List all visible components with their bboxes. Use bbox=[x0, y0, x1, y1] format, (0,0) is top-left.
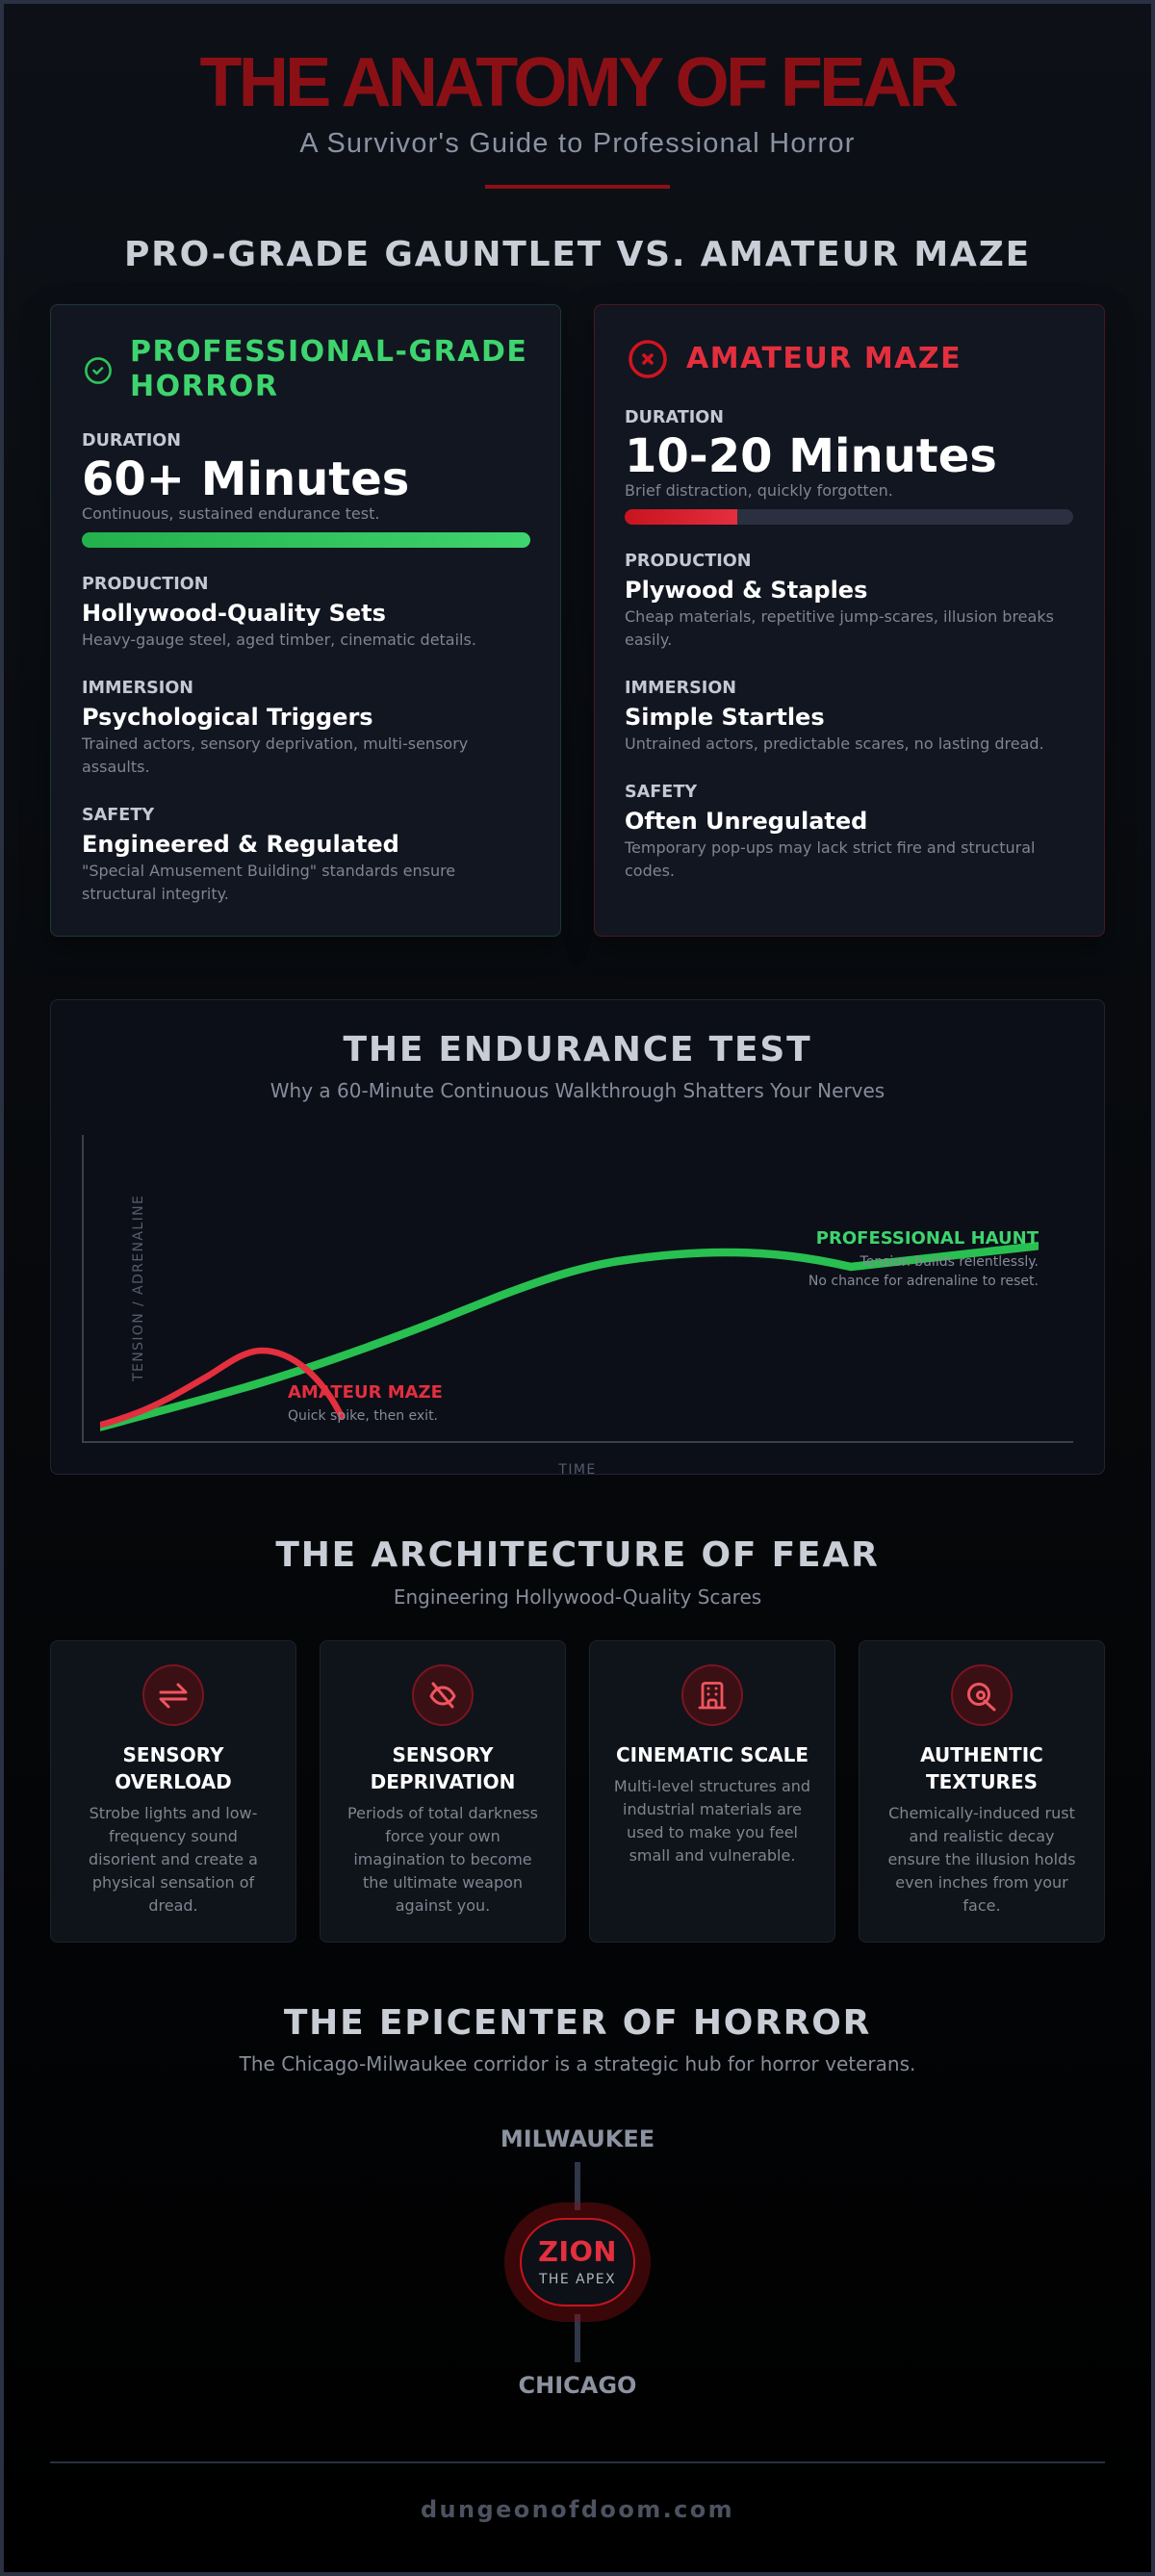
card text: physical sensation of bbox=[92, 1873, 254, 1892]
metric: immersion: Untrained actors, predictable scares, no lasting dread. bbox=[625, 734, 1044, 753]
icon: swap arrows bbox=[142, 1664, 204, 1726]
card text bbox=[347, 1804, 538, 1915]
metric: production bbox=[82, 575, 476, 649]
card text bbox=[614, 1777, 810, 1865]
metric: safety: Temporary pop-ups may lack strict fire and structural bbox=[625, 838, 1035, 857]
curve: professional haunt bbox=[92, 1245, 1049, 1429]
card text: Multi-level structures and bbox=[614, 1777, 810, 1795]
metric: duration: DURATION bbox=[82, 431, 181, 451]
card title: AUTHENTIC bbox=[920, 1743, 1043, 1766]
card text bbox=[89, 1804, 258, 1915]
chart axes bbox=[83, 1135, 1073, 1442]
card title: SENSORY bbox=[393, 1743, 493, 1766]
heading: comparison: PRO-GRADE GAUNTLET VS. AMATEUR MAZE bbox=[124, 235, 1031, 274]
panel heading: PROFESSIONAL-GRADE bbox=[130, 335, 527, 369]
card title bbox=[920, 1743, 1043, 1793]
panel: professional-grade horror bbox=[50, 304, 561, 937]
card text bbox=[887, 1804, 1076, 1915]
card text: against you. bbox=[396, 1896, 490, 1915]
line chart: tension over time bbox=[82, 1135, 1073, 1478]
metric: immersion bbox=[81, 679, 468, 776]
card title: OVERLOAD bbox=[115, 1770, 232, 1793]
card text: industrial materials are bbox=[623, 1800, 802, 1818]
panel heading bbox=[130, 335, 527, 403]
metric: immersion: assaults. bbox=[82, 758, 150, 776]
metric: duration: 60+ Minutes bbox=[82, 452, 409, 506]
metric: immersion: IMMERSION bbox=[625, 679, 736, 698]
label: professional haunt: PROFESSIONAL HAUNT bbox=[816, 1228, 1040, 1249]
metric: immersion: Simple Startles bbox=[625, 704, 825, 731]
metric: immersion: Psychological Triggers bbox=[82, 704, 373, 731]
metric: immersion: Trained actors, sensory deprivation, multi-sensory bbox=[82, 734, 468, 753]
metric: production: Heavy-gauge steel, aged timber, cinematic details. bbox=[82, 631, 476, 649]
metric: production bbox=[625, 552, 1054, 649]
card title bbox=[115, 1743, 232, 1793]
metric: production: PRODUCTION bbox=[82, 575, 208, 594]
hub: zion bbox=[520, 2218, 635, 2306]
card text: force your own bbox=[385, 1827, 500, 1845]
card title bbox=[371, 1743, 515, 1793]
label: professional haunt: No chance for adrenaline to reset. bbox=[808, 1274, 1039, 1289]
heading: epicenter: THE EPICENTER OF HORROR bbox=[284, 2003, 871, 2043]
hub name: ZION bbox=[538, 2235, 617, 2268]
label: amateur maze: Quick spike, then exit. bbox=[288, 1408, 438, 1424]
card title: SENSORY bbox=[123, 1743, 223, 1766]
icon: magnifier bbox=[951, 1664, 1013, 1726]
footer divider bbox=[50, 2461, 1105, 2463]
city label: chicago: CHICAGO bbox=[519, 2372, 636, 2399]
card text: used to make you feel bbox=[627, 1823, 798, 1842]
label: professional haunt: Tension builds relentlessly. bbox=[859, 1254, 1039, 1270]
card text: the ultimate weapon bbox=[363, 1873, 523, 1892]
metric: safety: Often Unregulated bbox=[625, 808, 867, 835]
metric: safety: Engineered & Regulated bbox=[82, 831, 399, 858]
metric: immersion: IMMERSION bbox=[82, 679, 193, 698]
metric: duration: Brief distraction, quickly forgotten. bbox=[625, 481, 893, 500]
metric: duration bbox=[82, 431, 409, 523]
heading: architecture: THE ARCHITECTURE OF FEAR bbox=[275, 1535, 880, 1575]
subheading: Why a 60-Minute Continuous Walkthrough Shatters Your Nerves bbox=[270, 1079, 885, 1102]
card text: Strobe lights and low- bbox=[90, 1804, 257, 1822]
label: amateur maze bbox=[288, 1382, 443, 1424]
card text: frequency sound bbox=[109, 1827, 238, 1845]
progress bar: full bbox=[82, 532, 530, 548]
metric: production: Plywood & Staples bbox=[625, 577, 867, 604]
metric: safety: codes. bbox=[625, 862, 675, 880]
metric: safety: SAFETY bbox=[625, 783, 697, 802]
metric: immersion bbox=[625, 679, 1044, 753]
card text: even inches from your bbox=[895, 1873, 1068, 1892]
metric: duration: 10-20 Minutes bbox=[625, 429, 997, 483]
icon: x circle bbox=[629, 340, 667, 378]
subtitle: A Survivor's Guide to Professional Horror bbox=[299, 128, 856, 159]
metric: production: PRODUCTION bbox=[625, 552, 751, 571]
card title: DEPRIVATION bbox=[371, 1770, 515, 1793]
metric: safety bbox=[624, 783, 1035, 880]
metric: production: Hollywood-Quality Sets bbox=[82, 600, 386, 627]
metric: duration bbox=[625, 408, 997, 500]
hub caption: THE APEX bbox=[539, 2272, 616, 2287]
title underline bbox=[485, 185, 670, 189]
metric: duration: Continuous, sustained endurance test. bbox=[82, 504, 379, 523]
card text: Periods of total darkness bbox=[347, 1804, 538, 1822]
subheading: The Chicago-Milwaukee corridor is a strategic hub for horror veterans. bbox=[240, 2052, 915, 2075]
icon: building bbox=[681, 1664, 743, 1726]
connector: south bbox=[575, 2314, 580, 2362]
metric: safety: SAFETY bbox=[82, 806, 154, 825]
card text: ensure the illusion holds bbox=[887, 1850, 1076, 1868]
metric: duration: DURATION bbox=[625, 408, 724, 427]
label: professional haunt bbox=[808, 1228, 1040, 1289]
metric: safety bbox=[82, 806, 455, 903]
card text: imagination to become bbox=[353, 1850, 532, 1868]
axis label: time: TIME bbox=[557, 1462, 597, 1478]
metric: safety: "Special Amusement Building" standards ensure bbox=[82, 862, 455, 880]
label: amateur maze: AMATEUR MAZE bbox=[288, 1382, 443, 1403]
metric: safety: structural integrity. bbox=[82, 885, 229, 903]
panel heading: HORROR bbox=[130, 370, 278, 403]
axis label: tension: TENSION / ADRENALINE bbox=[131, 1195, 146, 1382]
panel heading: AMATEUR MAZE bbox=[686, 342, 962, 375]
card text: Chemically-induced rust bbox=[888, 1804, 1075, 1822]
card title: CINEMATIC SCALE bbox=[616, 1743, 808, 1766]
card text: and realistic decay bbox=[910, 1827, 1054, 1845]
icon: eye off bbox=[412, 1664, 474, 1726]
card text: face. bbox=[962, 1896, 1001, 1915]
title: THE ANATOMY OF FEAR bbox=[200, 44, 955, 121]
panel: authentic textures bbox=[859, 1640, 1105, 1943]
card text: small and vulnerable. bbox=[629, 1846, 795, 1865]
footer: website: dungeonofdoom.com bbox=[421, 2496, 734, 2523]
panel: cinematic scale bbox=[589, 1640, 835, 1943]
metric: production: easily. bbox=[625, 631, 672, 649]
panel: sensory overload bbox=[50, 1640, 296, 1943]
heading: endurance test: THE ENDURANCE TEST bbox=[344, 1030, 811, 1069]
panel: sensory deprivation bbox=[320, 1640, 566, 1943]
panel: amateur maze bbox=[594, 304, 1105, 937]
card title: TEXTURES bbox=[926, 1770, 1038, 1793]
card text: dread. bbox=[148, 1896, 198, 1915]
card text: disorient and create a bbox=[89, 1850, 258, 1868]
icon: check circle bbox=[85, 357, 112, 384]
curve: amateur maze bbox=[92, 1351, 343, 1427]
subheading: Engineering Hollywood-Quality Scares bbox=[394, 1585, 761, 1609]
metric: production: Cheap materials, repetitive jump-scares, illusion breaks bbox=[625, 607, 1054, 626]
map diagram: corridor bbox=[500, 2125, 654, 2399]
city label: milwaukee: MILWAUKEE bbox=[500, 2125, 654, 2152]
panel: endurance test bbox=[50, 999, 1105, 1475]
progress bar: quarter bbox=[625, 509, 1073, 525]
connector: north bbox=[575, 2162, 580, 2210]
